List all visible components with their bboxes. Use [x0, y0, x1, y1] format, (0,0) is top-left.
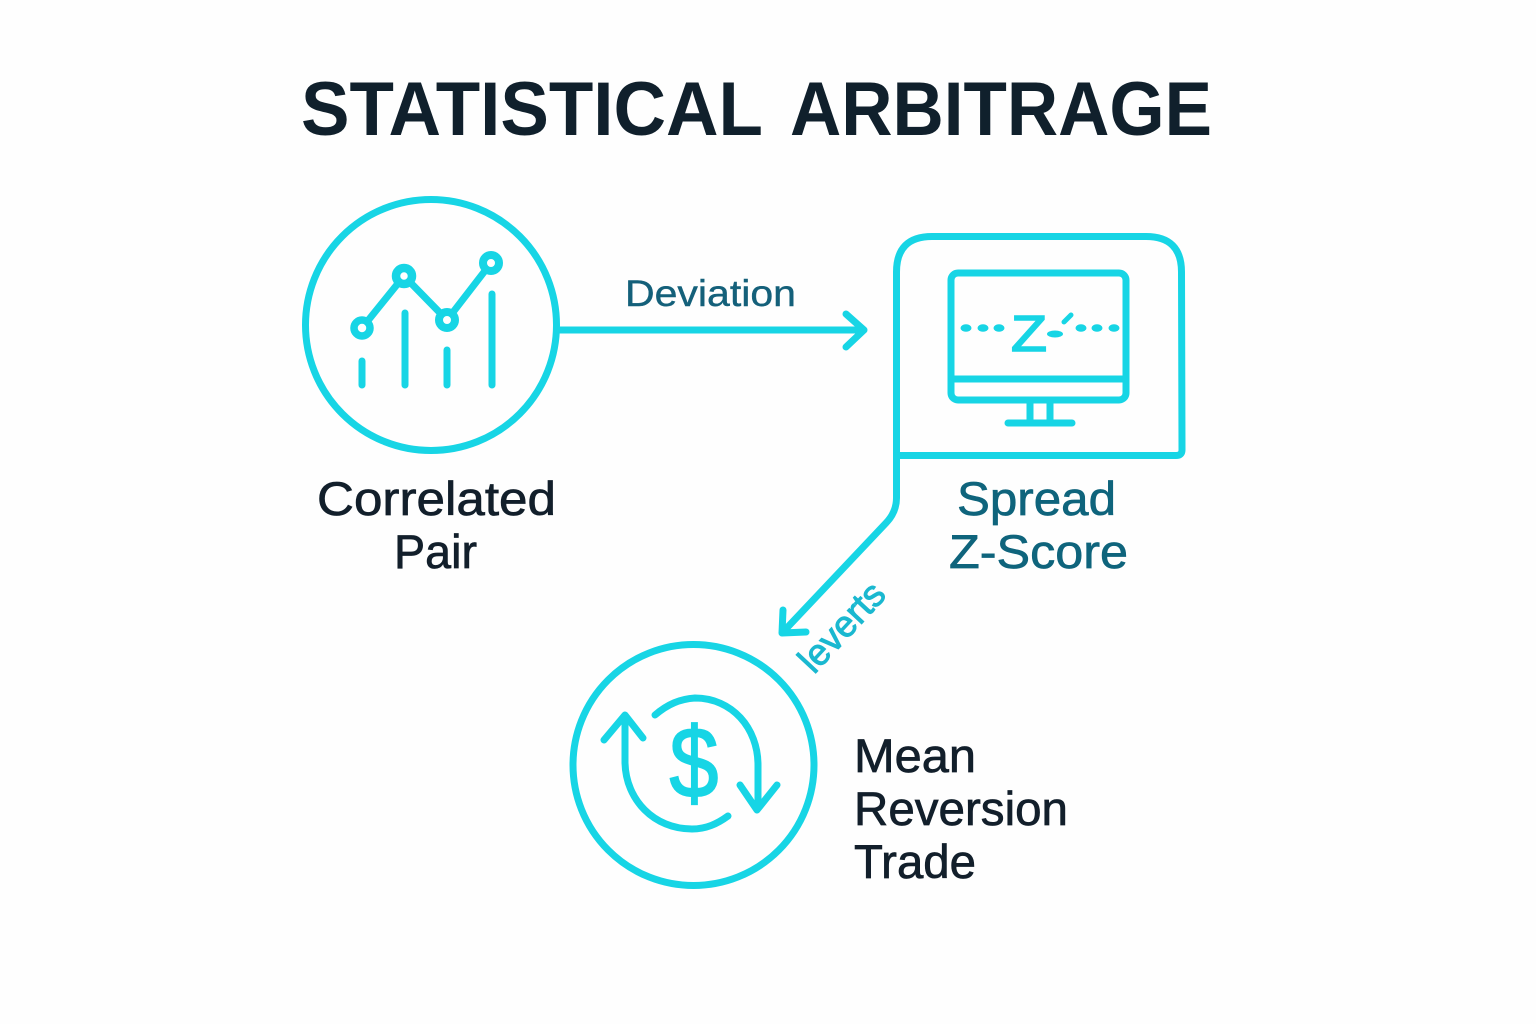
label: reverts: leverts: [790, 574, 894, 680]
panel: spread z-score: [782, 236, 1182, 633]
icon: circle with line chart: [306, 200, 556, 450]
panel: correlated pair: [306, 200, 556, 578]
icon: monitor with z-score: [951, 273, 1126, 423]
label: correlated pair: [317, 472, 556, 578]
label: deviation: Deviation: [625, 273, 796, 314]
icon: circle with dollar and cycle arrows: [573, 644, 814, 886]
label: spread z-score: Z-Score: [949, 525, 1128, 578]
title: ARBITRAGE: [790, 67, 1212, 152]
title: [301, 67, 1212, 152]
label: mean reversion trade: Mean: [854, 729, 976, 782]
box outline: [896, 236, 1182, 456]
panel: mean reversion trade: [573, 644, 1068, 888]
label: mean reversion trade: [854, 729, 1068, 888]
arrow: deviation: [560, 314, 864, 347]
arrow: reverts: [782, 456, 896, 633]
title: STATISTICAL: [301, 67, 763, 152]
label: mean reversion trade: Trade: [854, 835, 976, 888]
label: mean reversion trade: Reversion: [854, 782, 1068, 835]
label: spread z-score: Spread: [957, 472, 1116, 525]
icon: monitor with z-score: Z: [1011, 305, 1047, 362]
icon: circle with dollar and cycle arrows: $: [670, 707, 718, 818]
label: correlated pair: Pair: [394, 525, 477, 578]
label: spread z-score: [949, 472, 1128, 578]
label: correlated pair: Correlated: [317, 472, 556, 525]
